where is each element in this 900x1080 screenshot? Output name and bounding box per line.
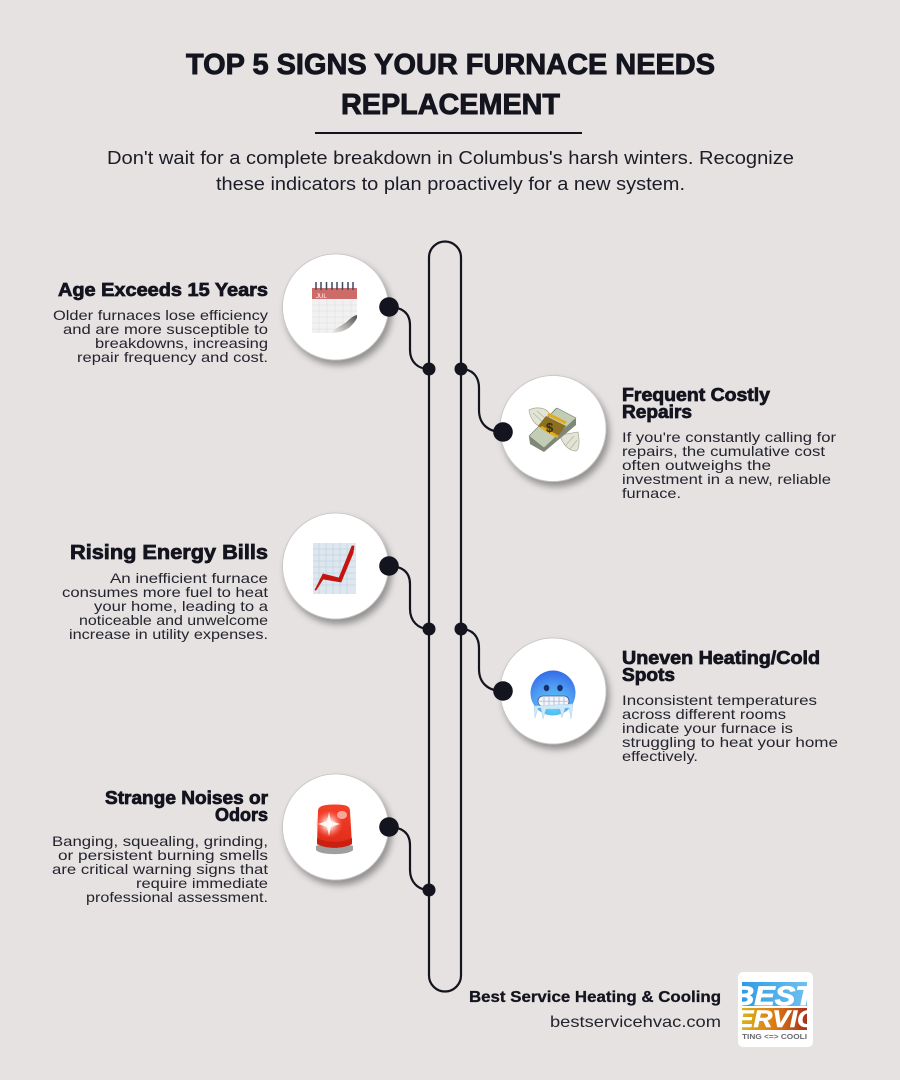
panel: frequent costly repairs <box>454 362 836 501</box>
body text: professional assessment. <box>86 889 268 905</box>
panel: uneven heating <box>454 622 838 764</box>
body text: repair frequency and cost. <box>77 349 268 365</box>
icon circle 2 <box>500 376 606 482</box>
body text: If you're constantly calling for <box>622 429 836 445</box>
heading <box>622 385 770 422</box>
icon: cold face <box>530 670 576 719</box>
heading: Strange Noises or <box>105 788 268 808</box>
body text: often outweighs the <box>622 457 771 473</box>
body text: Inconsistent temperatures <box>622 692 817 708</box>
icon circle 3 <box>282 513 388 619</box>
node dot large 3 <box>379 556 399 576</box>
body text: across different rooms <box>622 706 786 722</box>
body text <box>622 692 838 764</box>
title: TOP 5 SIGNS YOUR FURNACE NEEDS <box>186 49 715 81</box>
body text: repairs, the cumulative cost <box>622 443 825 459</box>
connector 4 <box>461 629 503 691</box>
icon: money with wings: $ <box>546 420 554 435</box>
panel: strange noises or odors <box>52 774 436 905</box>
heading <box>622 648 820 685</box>
body text: An inefficient furnace <box>110 570 268 586</box>
body text <box>52 833 268 905</box>
heading: Frequent Costly <box>622 385 770 405</box>
node dot small 4 <box>454 622 468 636</box>
body text: effectively. <box>622 748 698 764</box>
node dot small 2 <box>454 362 468 376</box>
connector 3 <box>389 566 429 629</box>
body text: consumes more fuel to heat <box>62 584 268 600</box>
node dot large 1 <box>379 297 399 317</box>
title: REPLACEMENT <box>341 89 560 121</box>
logo: TING <=> COOLI <box>742 1034 807 1041</box>
subtitle <box>107 148 794 194</box>
icon: siren <box>315 804 353 854</box>
body text: investment in a new, reliable <box>622 471 831 487</box>
body text: struggling to heat your home <box>622 734 838 750</box>
node dot small 5 <box>422 884 436 896</box>
panel: rising energy bills <box>62 513 436 642</box>
heading: Spots <box>622 665 675 685</box>
footer brand text <box>469 989 721 1031</box>
body text: noticeable and unwelcome <box>79 612 268 628</box>
logo: BEST <box>732 981 817 1011</box>
body text: furnace. <box>622 485 681 501</box>
heading: Uneven Heating/Cold <box>622 648 820 668</box>
subtitle: these indicators to plan proactively for a new system. <box>216 174 685 194</box>
icon: rising chart <box>313 543 356 594</box>
body text: require immediate <box>136 875 268 891</box>
logo <box>738 972 813 1047</box>
body text: or persistent burning smells <box>58 847 268 863</box>
node dot large 2 <box>493 422 513 442</box>
body text: breakdowns, increasing <box>95 335 268 351</box>
icon circle 1 <box>282 254 388 360</box>
body text: increase in utility expenses. <box>69 626 268 642</box>
connector 1 <box>389 307 429 369</box>
body text: and are more susceptible to <box>63 321 268 337</box>
icon circle 4 <box>500 638 606 744</box>
body text <box>53 307 268 365</box>
heading: Repairs <box>622 402 692 422</box>
body text <box>622 429 836 501</box>
icon: calendar: JUL <box>316 294 327 300</box>
body text: Older furnaces lose efficiency <box>53 307 268 323</box>
panel: age exceeds 15 years <box>53 254 436 376</box>
footer brand text: bestservicehvac.com <box>550 1014 721 1031</box>
connector 5 <box>389 827 429 890</box>
body text: are critical warning signs that <box>52 861 268 877</box>
icon: money with wings <box>529 408 579 452</box>
heading <box>105 788 268 825</box>
subtitle: Don't wait for a complete breakdown in Columbus's harsh winters. Recognize <box>107 148 794 168</box>
node dot large 5 <box>379 817 399 837</box>
body text <box>62 570 268 642</box>
node dot large 4 <box>493 681 513 701</box>
heading: Odors <box>215 805 268 825</box>
icon circle 5 <box>282 774 388 880</box>
node dot small 3 <box>422 622 436 636</box>
heading: Rising Energy Bills <box>70 542 268 564</box>
timeline pill track <box>429 242 461 992</box>
body text: your home, leading to a <box>94 598 268 614</box>
footer brand text: Best Service Heating & Cooling <box>469 989 721 1006</box>
connector 2 <box>461 369 503 432</box>
body text: Banging, squealing, grinding, <box>52 833 268 849</box>
title <box>186 49 715 121</box>
heading: Age Exceeds 15 Years <box>58 280 268 300</box>
body text: indicate your furnace is <box>622 720 793 736</box>
logo: ERVIC <box>736 1006 817 1033</box>
icon: calendar <box>312 282 357 333</box>
node dot small 1 <box>422 362 436 376</box>
